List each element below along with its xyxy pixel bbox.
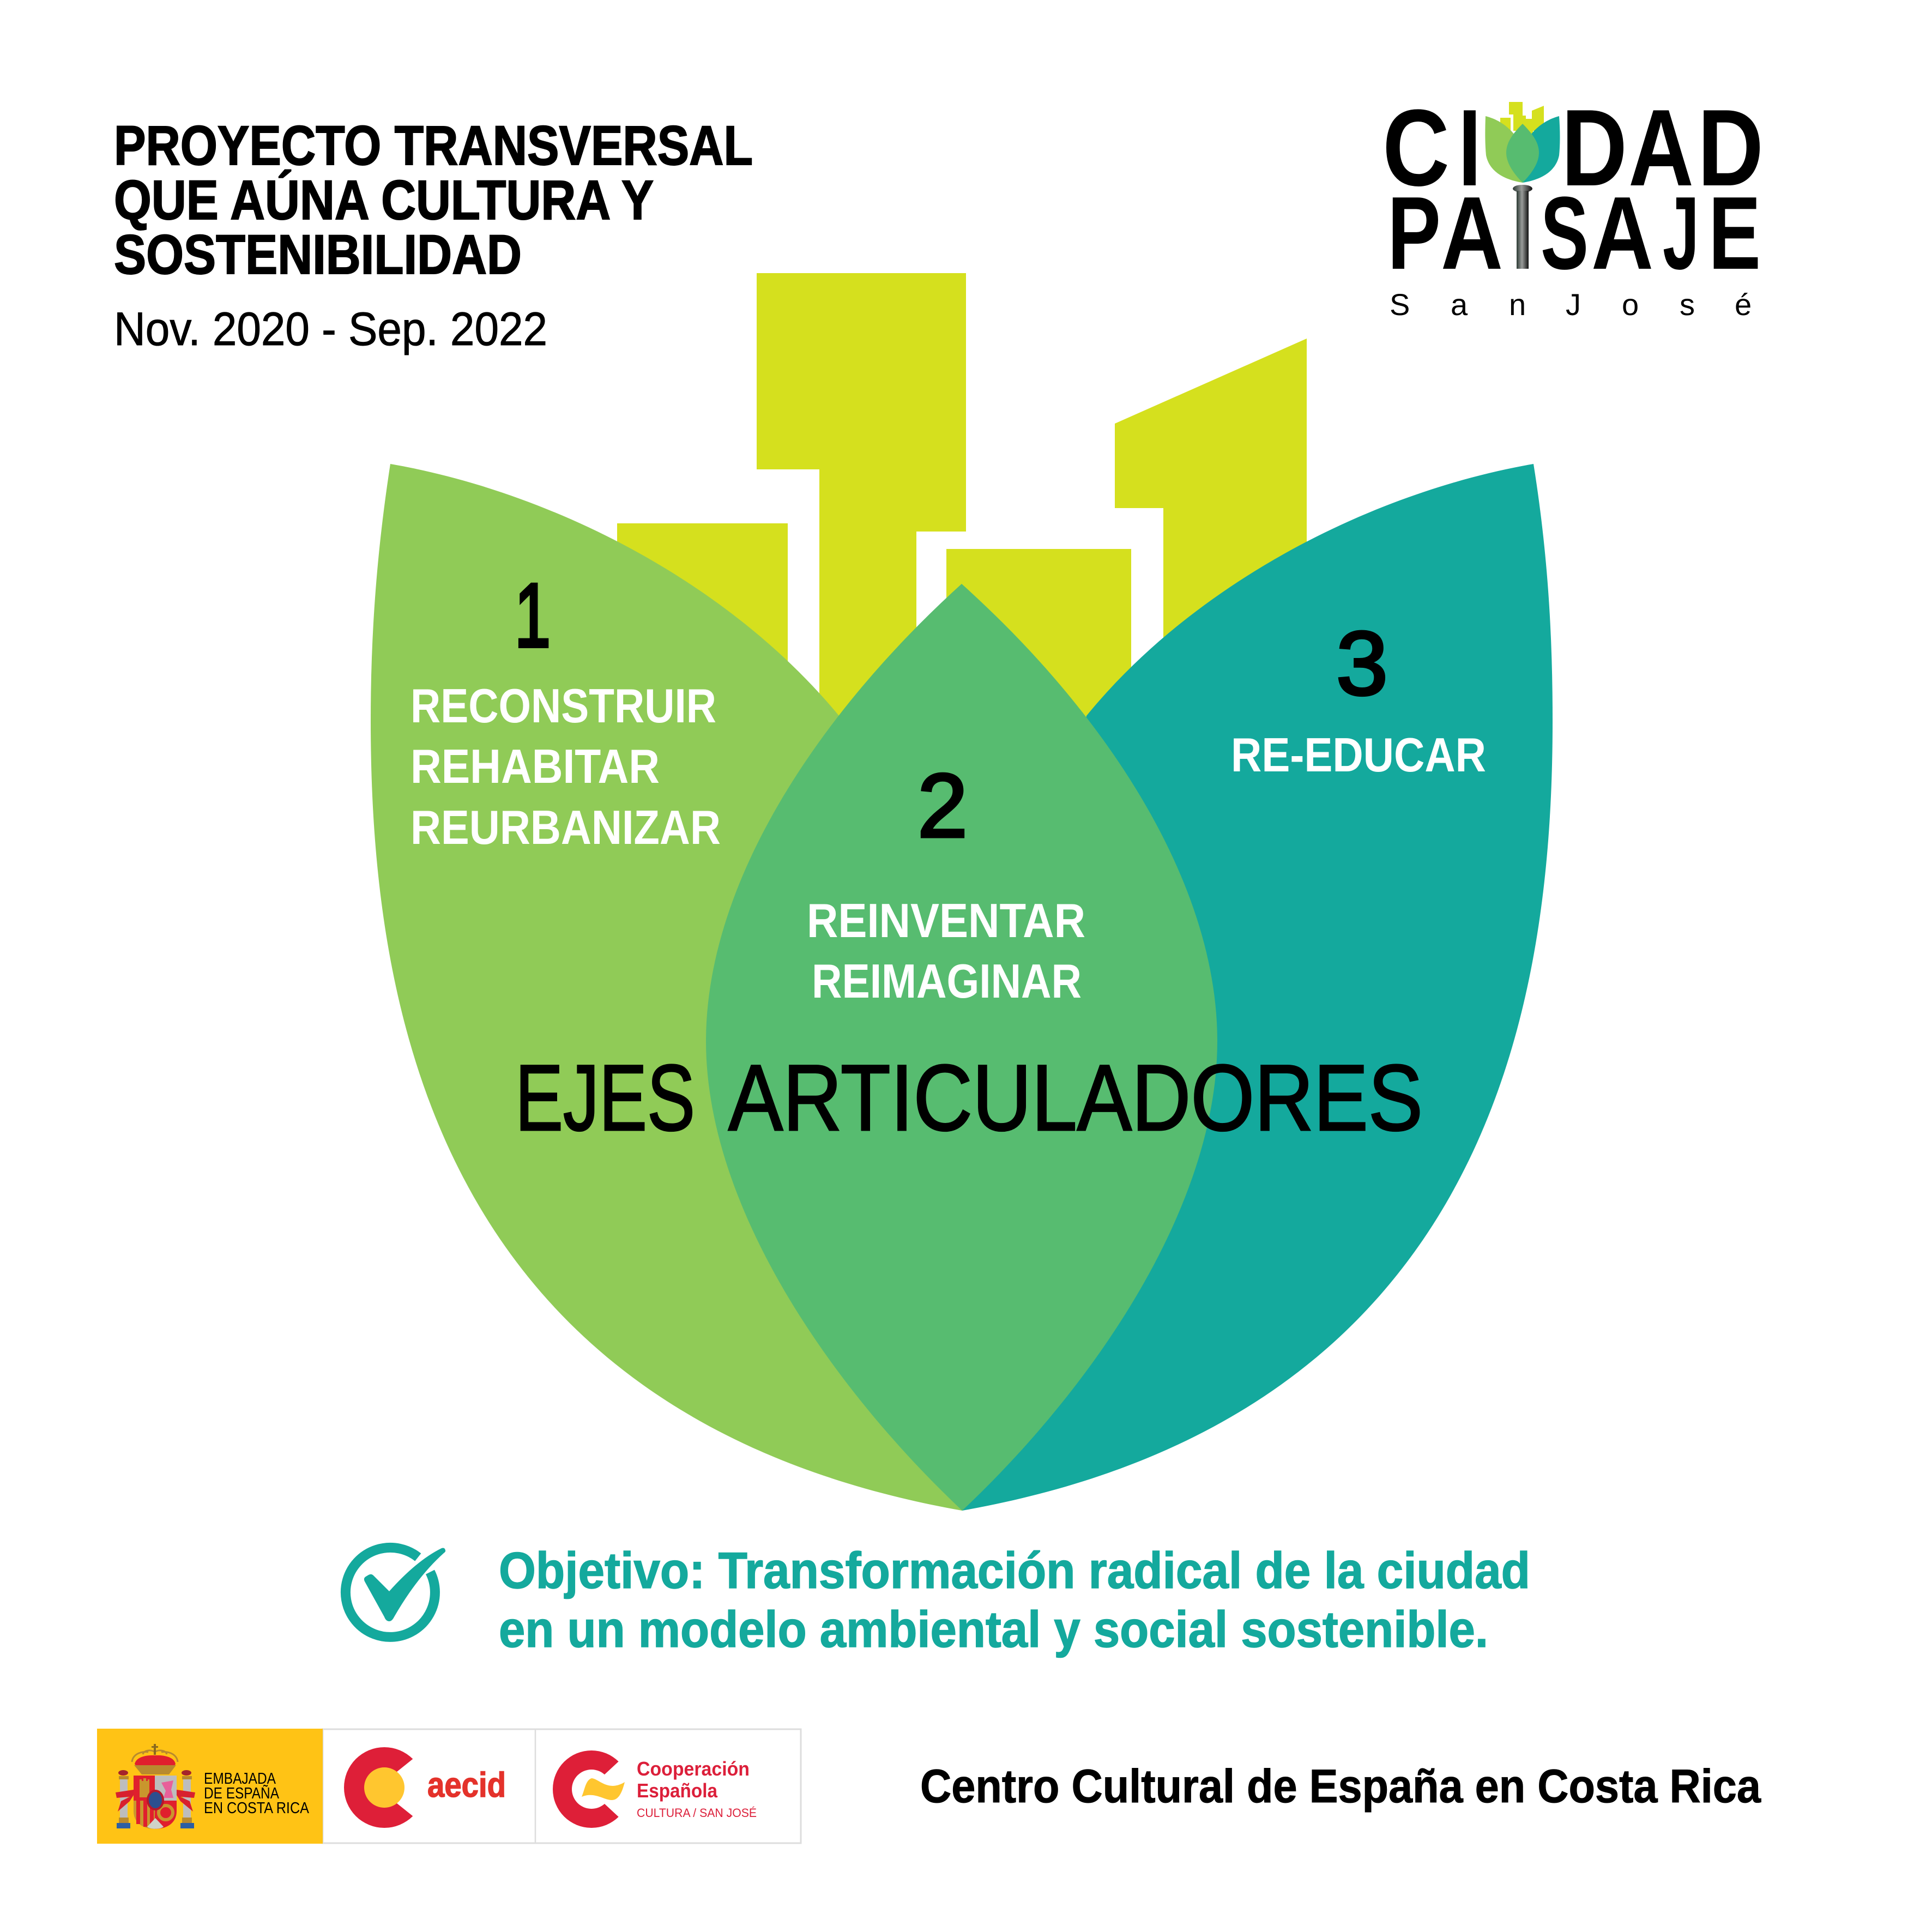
city buildings (617, 273, 1307, 763)
building: small left (617, 523, 788, 703)
logo strip (97, 1729, 801, 1844)
axis 1 labels: RECONSTRUIR (410, 679, 716, 733)
logo wordmark: CIUDAD: D (1698, 87, 1764, 209)
axis 1 labels: REHABITAR (410, 739, 660, 793)
embassy text: EMBAJADA (204, 1770, 276, 1788)
title: SOSTENIBILIDAD (114, 224, 522, 286)
axis 2 labels: REINVENTAR (807, 893, 1085, 947)
logo wordmark: CIUDAD: C (1382, 87, 1450, 209)
title: PROYECTO TRANSVERSAL (114, 114, 753, 177)
logo wordmark: PAISAJE: E (1708, 176, 1761, 291)
axis 2 labels (807, 893, 1085, 1008)
footer: cultural centre name: Centro Cultural de España en Costa Rica (920, 1760, 1761, 1813)
logo wordmark: CIUDAD: A (1628, 87, 1694, 209)
logo subtitle: SanJosé (1390, 287, 1752, 322)
logo wordmark: PAISAJE: A (1591, 176, 1653, 291)
title: QUE AÚNA CULTURA Y (114, 169, 654, 231)
objective statement: en un modelo ambiental y social sostenible. (499, 1601, 1488, 1658)
axis 3 label: RE-EDUCAR (1231, 728, 1486, 782)
embassy text: EN COSTA RICA (204, 1800, 310, 1817)
title (114, 114, 753, 286)
logo wordmark: PAISAJE: P (1387, 176, 1441, 291)
petal: left (371, 464, 962, 1511)
objective statement: Objetivo: Transformación radical de la ciudad (499, 1542, 1530, 1599)
logo: aecid (344, 1747, 506, 1828)
logo lamp post (1513, 185, 1532, 269)
objective statement (499, 1542, 1530, 1658)
logo wordmark: CIUDAD: D (1561, 87, 1627, 209)
building: right slanted roof (1115, 339, 1307, 709)
date range: Nov. 2020 - Sep. 2022 (114, 303, 547, 355)
embassy text (204, 1770, 310, 1817)
building: tall (757, 273, 966, 763)
logo wordmark: PAISAJE: A (1441, 176, 1503, 291)
axis 2 labels: REIMAGINAR (812, 954, 1082, 1008)
petal: centre (706, 584, 1217, 1511)
building: small centre (946, 549, 1131, 729)
axis 1 number: 1 (515, 565, 551, 666)
logo wordmark: PAISAJE (1387, 176, 1761, 291)
logo: Cooperación Española: Cooperación (637, 1758, 750, 1780)
logo: Cooperación Española (553, 1750, 757, 1828)
logo wordmark: CIUDAD (1382, 87, 1764, 209)
logo: Ciudad Paisaje San José (1382, 87, 1764, 322)
petal: right (962, 464, 1553, 1511)
logo wordmark: PAISAJE: S (1541, 176, 1589, 291)
panel: embassy of Spain (97, 1729, 323, 1844)
axis 3 number: 3 (1336, 613, 1388, 714)
logo: aecid: aecid (427, 1765, 506, 1804)
axis 1 labels (410, 679, 721, 854)
embassy text: DE ESPAÑA (204, 1784, 280, 1802)
logo strip frame (323, 1729, 801, 1843)
axis 1 labels: REURBANIZAR (410, 800, 721, 854)
heading: ejes articuladores: EJES (515, 1046, 695, 1150)
logo wordmark: PAISAJE: J (1663, 176, 1699, 291)
logo tulip mark (1485, 102, 1560, 183)
heading: ejes articuladores: ARTICULADORES (728, 1046, 1423, 1150)
icon: check mark in circle (346, 1548, 445, 1637)
logo: Cooperación Española: CULTURA / SAN JOSÉ (637, 1806, 757, 1820)
axis 2 number: 2 (917, 756, 968, 856)
heading: ejes articuladores (515, 1046, 1423, 1150)
icon: coat of arms (116, 1744, 195, 1829)
logo: Cooperación Española: Española (637, 1779, 718, 1802)
logo wordmark: CIUDAD: I (1458, 87, 1481, 209)
